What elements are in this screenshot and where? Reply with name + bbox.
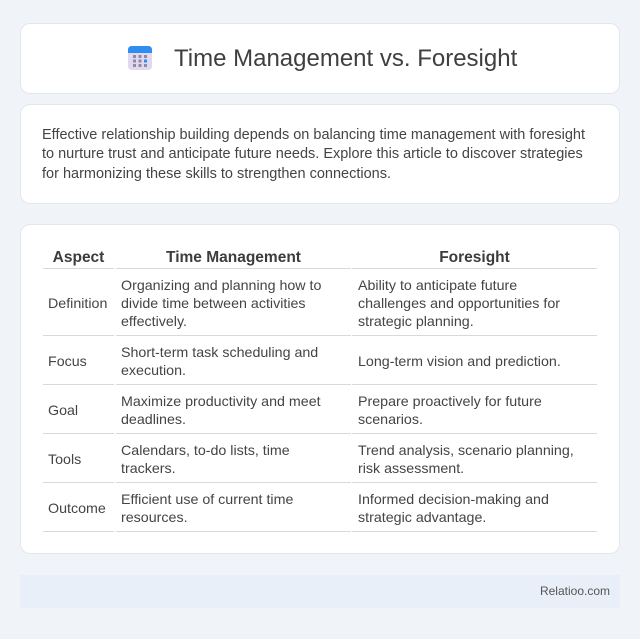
row: tools: trackers. bbox=[121, 461, 176, 477]
row: outcome bbox=[43, 492, 597, 532]
row: goal: Maximize productivity and meet bbox=[121, 394, 321, 410]
row: tools: Trend analysis, scenario planning, bbox=[358, 443, 574, 459]
icon: calendar bbox=[128, 46, 152, 70]
intro text: Effective relationship building depends on balancing time management with foresight bbox=[42, 127, 585, 143]
row: focus: Short-term task scheduling and bbox=[121, 345, 318, 361]
table header bbox=[43, 249, 597, 269]
row: definition: Definition bbox=[48, 296, 107, 312]
row: definition: Ability to anticipate future bbox=[358, 278, 517, 294]
footer text: Relatioo.com bbox=[540, 584, 610, 598]
row: tools bbox=[43, 443, 597, 483]
row: definition: divide time between activities bbox=[121, 296, 306, 312]
row: outcome: strategic advantage. bbox=[358, 510, 486, 526]
row: focus bbox=[43, 345, 597, 385]
row: definition: challenges and opportunities for bbox=[358, 296, 560, 312]
row: goal: deadlines. bbox=[121, 412, 186, 428]
row: goal: Prepare proactively for future bbox=[358, 394, 542, 410]
intro card bbox=[20, 104, 620, 204]
row: outcome: resources. bbox=[121, 510, 188, 526]
row: focus: execution. bbox=[121, 363, 186, 379]
row: goal: scenarios. bbox=[358, 412, 423, 428]
row: outcome: Informed decision-making and bbox=[358, 492, 549, 508]
row: focus: Focus bbox=[48, 354, 87, 370]
row: definition: Organizing and planning how to bbox=[121, 278, 321, 294]
row: definition bbox=[43, 278, 597, 336]
row: outcome: Outcome bbox=[48, 501, 106, 517]
row: focus: Long-term vision and prediction. bbox=[358, 354, 561, 370]
row: tools: Calendars, to-do lists, time bbox=[121, 443, 290, 459]
row: outcome: Efficient use of current time bbox=[121, 492, 293, 508]
title: Time Management vs. Foresight bbox=[174, 45, 517, 72]
intro text: to nurture trust and anticipate future needs. Explore this article to discover strategies bbox=[42, 146, 583, 162]
header card bbox=[20, 23, 620, 94]
comparison table bbox=[43, 249, 597, 532]
table header: Foresight bbox=[439, 249, 510, 266]
table card bbox=[20, 224, 620, 554]
row: goal: Goal bbox=[48, 403, 78, 419]
row: definition: effectively. bbox=[121, 314, 187, 330]
intro text bbox=[42, 127, 585, 182]
intro text: for harmonizing these skills to strengthen connections. bbox=[42, 166, 391, 182]
row: definition: strategic planning. bbox=[358, 314, 474, 330]
row: goal bbox=[43, 394, 597, 434]
row: tools: risk assessment. bbox=[358, 461, 464, 477]
footer bar bbox=[20, 575, 620, 608]
row: tools: Tools bbox=[48, 452, 81, 468]
table header: Time Management bbox=[166, 249, 301, 266]
table header: Aspect bbox=[53, 249, 104, 266]
